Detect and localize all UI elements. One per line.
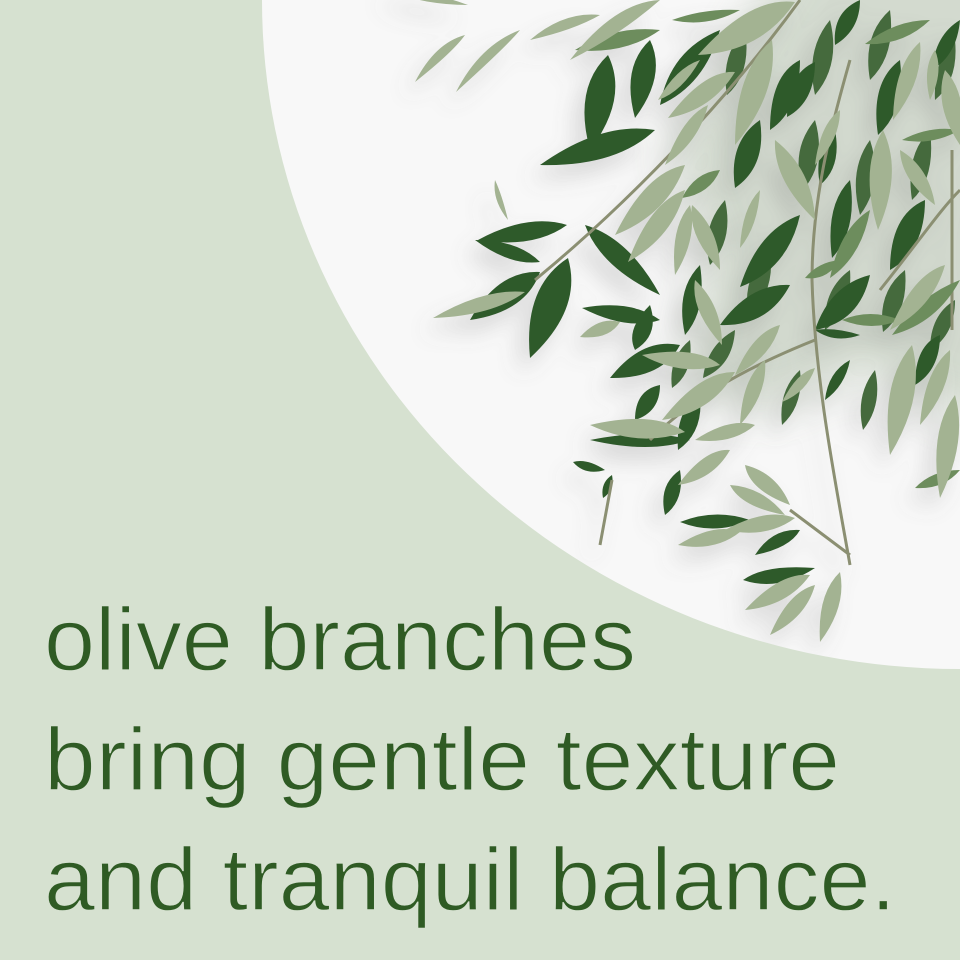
stems — [535, 0, 960, 565]
foliage mass — [670, 0, 960, 450]
mid-dark filler leaves — [671, 10, 956, 430]
headline text: and tranquil balance. — [44, 829, 896, 929]
headline text — [44, 589, 896, 929]
mid-green leaves — [575, 10, 960, 488]
pale leaves — [385, 0, 960, 642]
white circle panel — [262, 0, 960, 669]
headline text: olive branches — [44, 589, 636, 689]
dark leaves — [470, 0, 960, 584]
photo: olive branches — [385, 0, 960, 642]
headline text: bring gentle texture — [44, 709, 840, 809]
